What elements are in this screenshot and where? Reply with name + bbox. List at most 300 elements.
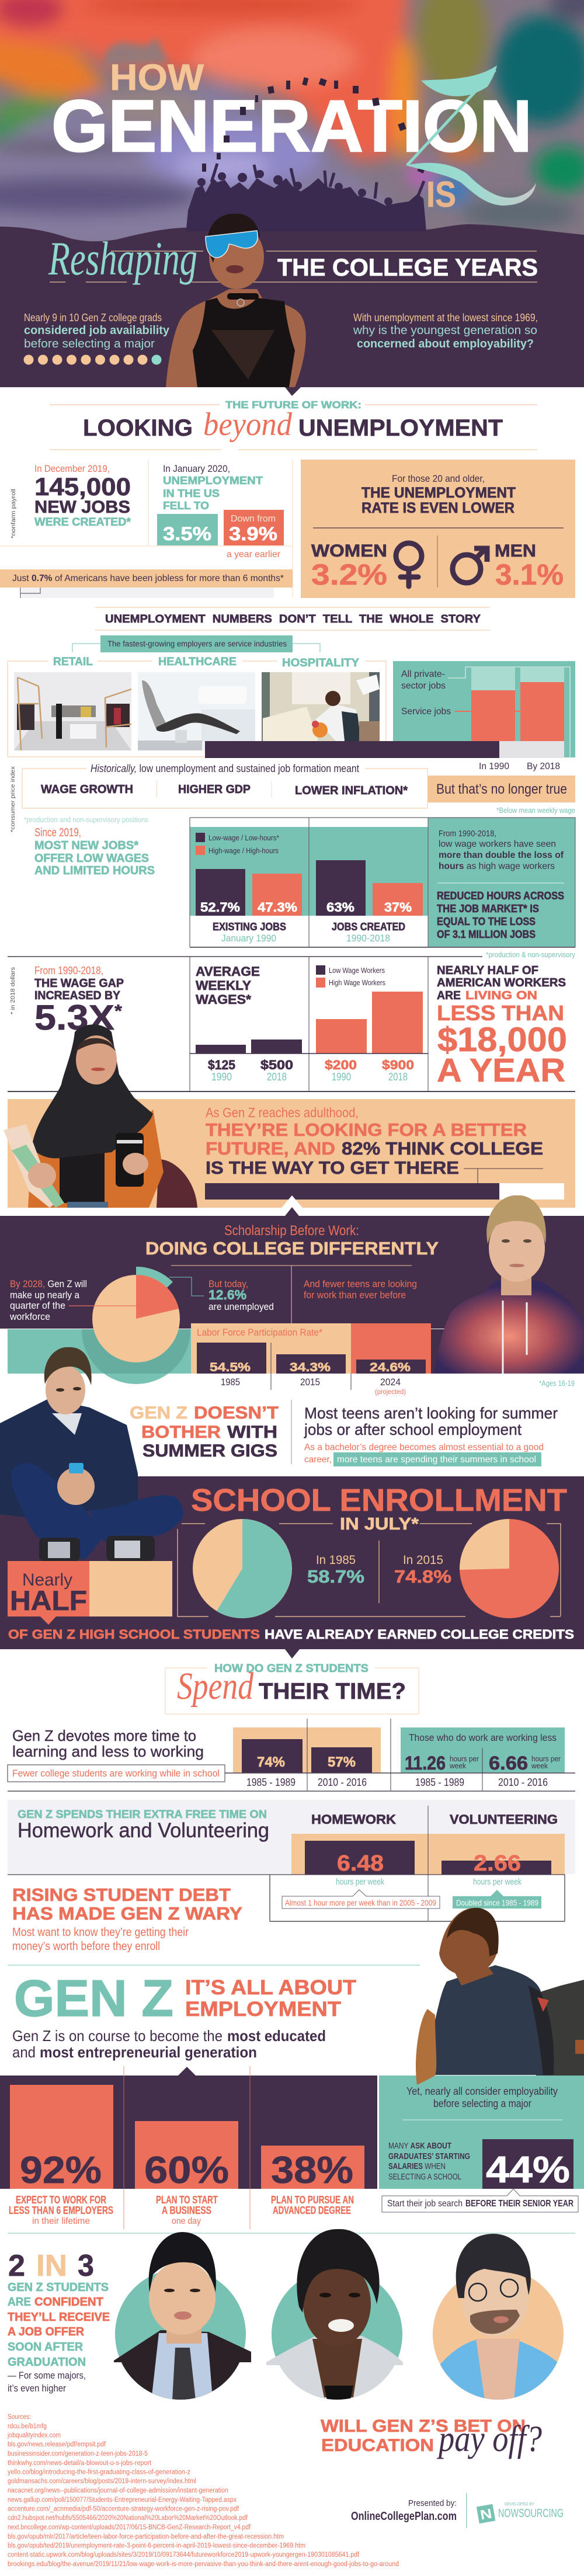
text: most new jobs: MOST NEW JOBS* xyxy=(34,839,138,852)
chart: average weekly wages: 1990 xyxy=(211,1071,232,1083)
hills xyxy=(0,224,584,387)
panel: working hours: 6.66 xyxy=(489,1753,528,1774)
sources list: yello.co/blog/introducing-the-first-graduating-class-of-generation-z xyxy=(8,2469,190,2476)
banner: looking for a better future: As Gen Z reaches adulthood, xyxy=(206,1105,359,1120)
panel: working hours: 1985 - 1989 xyxy=(415,1777,464,1788)
footer: presented by: OnlineCollegePlan.com xyxy=(351,2510,457,2523)
chart: average weekly wages: Low Wage Workers xyxy=(329,966,385,975)
chart years: In 1990 xyxy=(479,762,509,771)
footnote: 2018 dollars: * in 2018 dollars xyxy=(9,967,16,1014)
chart: existing jobs vs jobs created: 52.7% xyxy=(200,900,240,915)
panel: homework and volunteering: 6.48 xyxy=(337,1851,384,1876)
closing: will gen z's bet pay off: EDUCATION xyxy=(321,2436,434,2455)
chart: average weekly wages xyxy=(190,964,428,1083)
arrow: hero pointer xyxy=(285,387,301,396)
panel: working hours: Those who do work are working less xyxy=(409,1732,557,1743)
chart: service jobs share xyxy=(393,661,575,757)
chart: average weekly wages: $125 xyxy=(208,1058,235,1072)
year labels for labor chart: (projected) xyxy=(375,1388,406,1396)
panel: women and men rates: MEN xyxy=(495,541,536,561)
text: most teens: more teens are spending their summers in school xyxy=(337,1455,536,1465)
panel: service industries photos xyxy=(14,656,380,750)
stat: unemployment fell: 3.5% xyxy=(163,523,211,544)
stat: wage gap: 5.3X xyxy=(34,998,106,1037)
text: nearly 9 in 10: considered job availability xyxy=(24,324,170,337)
chart: expectations: 38% xyxy=(271,2149,353,2191)
photo: student with backpack xyxy=(416,1908,584,2085)
panel: working hours: hours per xyxy=(450,1755,479,1763)
labels: hours per week and callouts xyxy=(282,1877,541,1908)
footer: presented by xyxy=(351,2493,564,2528)
heading: how do gen z students spend their time: THEIR TIME? xyxy=(259,1679,406,1704)
photo: woman with sunglasses xyxy=(166,214,306,387)
chart: average weekly wages: WEEKLY xyxy=(196,978,251,993)
panel: consider employability: Yet, nearly all consider employability xyxy=(406,2085,558,2097)
section: scholarship before work xyxy=(0,1195,584,1384)
heading: how do gen z students spend their time xyxy=(165,1663,419,1714)
section: school enrollment: In 2015 xyxy=(403,1553,443,1567)
chart: service jobs share: sector jobs xyxy=(401,681,446,691)
text: most teens: jobs or after school employment xyxy=(304,1421,522,1438)
stat: wage gap: From 1990-2018, xyxy=(34,965,103,976)
stat: living on less than 18000: LESS THAN xyxy=(437,1001,564,1025)
stat: 2 in 3 confident: SOON AFTER xyxy=(8,2341,84,2353)
panel: loss of hours: REDUCED HOURS ACROSS xyxy=(437,890,564,902)
callout: job search before senior year xyxy=(382,2189,578,2212)
sources list: cdn2.hubspot.net/hubfs/5505466/2020%20National%20Labor%20Market%20Outlook.pdf xyxy=(8,2515,248,2522)
chart: existing jobs vs jobs created: High-wage / High-hours xyxy=(208,846,279,855)
photo: retail store xyxy=(14,672,131,750)
chart: average weekly wages: $900 xyxy=(382,1058,414,1072)
logo: nowsourcing xyxy=(477,2502,564,2523)
panel: women and men rates: 3.2% xyxy=(311,558,387,591)
text: most new jobs: AND LIMITED HOURS xyxy=(34,864,155,877)
stat: living on less than 18000: A YEAR xyxy=(437,1052,565,1089)
year labels for labor chart xyxy=(221,1343,575,1396)
portrait: woman in blazer xyxy=(266,2229,403,2406)
heading: rising student debt: HAS MADE GEN Z WARY xyxy=(12,1903,242,1924)
sources list xyxy=(7,2414,399,2568)
chart: existing jobs vs jobs created: 1990-2018 xyxy=(346,933,390,944)
heading: gen z all about employment xyxy=(12,1969,356,2061)
text: most teens: As a bachelor’s degree becomes almost essential to a good xyxy=(304,1442,544,1452)
heading: rising student debt: money’s worth before they enroll xyxy=(12,1940,160,1953)
banner: looking for a better future: THEY’RE LOOKING FOR A BETTER xyxy=(206,1120,527,1140)
stat: 145,000 new jobs: WERE CREATED* xyxy=(34,516,131,529)
chart: students working: 74% xyxy=(257,1754,285,1770)
label: fastest-growing employers: The fastest-growing employers are service industries xyxy=(107,639,287,648)
chart: labor force participation: 54.5% xyxy=(210,1361,251,1374)
logo: nowsourcing: N xyxy=(479,2505,493,2523)
text: fewer teens xyxy=(304,1278,417,1301)
sources list: goldmansachs.com/careers/blog/posts/2019-intern-survey/index.html xyxy=(8,2478,196,2485)
subtitle: the college years: THE COLLEGE YEARS xyxy=(277,253,538,281)
heading: gen z all about employment: most entrepreneurial generation xyxy=(40,2043,257,2061)
sources list: nacacnet.org/news--publications/journal-of-college-admission/instant-generation xyxy=(8,2487,228,2494)
chart: existing jobs vs jobs created: JOBS CREATED xyxy=(332,921,405,933)
panel: working hours: week xyxy=(449,1762,467,1770)
sources list: rdcu.be/b1mfg xyxy=(8,2423,47,2430)
hero banner xyxy=(0,0,584,387)
sources list: bls.gov/news.release/pdf/empsit.pdf xyxy=(8,2441,106,2448)
section: school enrollment: 58.7% xyxy=(307,1566,364,1587)
chart: existing jobs vs jobs created: Low-wage / Low-hours* xyxy=(208,833,279,842)
panel: women and men rates xyxy=(301,460,575,598)
stat: living on less than 18000: AMERICAN WORKERS xyxy=(437,976,566,989)
panel: historically: WAGE GROWTH xyxy=(41,783,133,796)
sources list: next.bncollege.com/wp-content/uploads/2017/06/15-BNCB-GenZ-Research-Report_v4.pdf xyxy=(8,2524,251,2531)
panel: homework and volunteering: Homework and Volunteering xyxy=(18,1819,269,1842)
heading: doing college differently: DOING COLLEGE DIFFERENTLY xyxy=(145,1238,439,1259)
chart: average weekly wages: 1990 xyxy=(332,1071,351,1083)
stat: living on less than 18000: LIVING ON xyxy=(465,989,537,1002)
footnote: nonfarm payroll: *nonfarm payroll xyxy=(10,489,17,538)
closing: will gen z's bet pay off xyxy=(321,2417,542,2459)
stat: 2 in 3 confident: ARE xyxy=(8,2296,31,2309)
sources list: bls.gov/opub/mlr/2017/article/teen-labor-force-participation-before-and-after-the-great-recession.htm xyxy=(8,2533,284,2540)
photo: teen sitting with phone xyxy=(0,1347,183,1561)
panel: homework and volunteering: GEN Z SPENDS THEIR EXTRA FREE TIME ON xyxy=(18,1809,267,1821)
chart: students working xyxy=(233,1727,381,1788)
title: how: HOW xyxy=(110,57,204,98)
text: with unemployment at the lowest: why is the youngest generation so xyxy=(353,324,537,337)
stat: 12.6 percent: are unemployed xyxy=(208,1301,274,1312)
text: nearly 9 in 10 xyxy=(24,312,170,350)
panel: historically xyxy=(22,763,427,808)
stat: 2 in 3 confident: CONFIDENT xyxy=(34,2296,103,2309)
section: school enrollment: 74.8% xyxy=(394,1566,451,1587)
pie: gen z share of workforce xyxy=(69,1267,204,1384)
stat: living on less than 18000: ARE xyxy=(437,989,461,1002)
heading: gen z doesn't bother: GEN Z xyxy=(130,1403,187,1423)
icon row: 9 of 10 dots xyxy=(23,355,161,364)
panel: working hours: 2010 - 2016 xyxy=(498,1777,548,1788)
chart: average weekly wages: High Wage Workers xyxy=(329,978,385,987)
stat: wage gap: * xyxy=(114,1002,122,1021)
stat: 12.6 percent: But today, xyxy=(208,1278,248,1289)
stat: 2 in 3 confident: GEN Z STUDENTS xyxy=(8,2281,109,2294)
icon: female symbol xyxy=(396,543,422,586)
chart: expectations xyxy=(0,2066,377,2229)
heading: gen z doesn't bother: BOTHER xyxy=(141,1423,221,1442)
photo: teen in galaxy hoodie xyxy=(434,1195,584,1374)
panel: loss of hours: more than double the loss of xyxy=(439,850,564,860)
chart: existing jobs vs jobs created xyxy=(190,827,428,944)
chart: average weekly wages: 2018 xyxy=(388,1071,408,1083)
chart: average weekly wages: $200 xyxy=(325,1058,357,1072)
text: most teens xyxy=(304,1405,558,1466)
sources list: news.gallup.com/poll/150077/Students-Entrepreneurial-Energy-Waiting-Tapped.aspx xyxy=(8,2497,237,2504)
heading: gen z doesn't bother: DOESN’T xyxy=(194,1403,279,1423)
stat: 145,000 new jobs: In December 2019, xyxy=(34,463,110,474)
stat: living on less than 18000: $18,000 xyxy=(437,1021,567,1059)
chart: expectations: 92% xyxy=(20,2149,102,2191)
sources list: jobqualityindex.com xyxy=(7,2432,61,2439)
year labels for labor chart: *Ages 16-19 xyxy=(539,1379,575,1388)
panel: homework and volunteering: HOMEWORK xyxy=(311,1812,396,1827)
chart: expectations: ADVANCED DEGREE xyxy=(273,2205,351,2216)
stat: 145,000 new jobs: NEW JOBS xyxy=(34,498,130,517)
chart: students working: 2010 - 2016 xyxy=(318,1777,367,1788)
banner: looking for a better future xyxy=(8,1099,575,1208)
text: by 2028: quarter of the xyxy=(10,1300,65,1311)
stat: 2 in 3 confident: GRADUATION xyxy=(8,2356,86,2369)
text: with unemployment at the lowest: concerned about employability? xyxy=(357,338,534,350)
stat: wage gap: INCREASED BY xyxy=(34,989,121,1002)
text: nearly 9 in 10: Nearly 9 in 10 Gen Z college grads xyxy=(24,312,162,324)
panel: service industries photos: HOSPITALITY xyxy=(282,657,359,669)
panel: service industries photos: HEALTHCARE xyxy=(158,656,237,668)
sources list: thinkwhy.com/news-detail/a-blowout-u-s-jobs-report xyxy=(8,2460,152,2467)
callout: no longer true xyxy=(427,776,575,802)
chart: service jobs share: Service jobs xyxy=(401,707,451,717)
panel: women and men rates: 3.1% xyxy=(495,558,564,591)
panel: historically: Historically, low unemployment and sustained job formation meant xyxy=(91,763,359,774)
text: most new jobs: OFFER LOW WAGES xyxy=(34,852,149,865)
rule lines xyxy=(50,251,537,282)
footnotes: *production and non-supervisory positions xyxy=(24,815,148,824)
panel: loss of hours: From 1990-2018, xyxy=(439,829,496,839)
heading: looking beyond unemployment: UNEMPLOYMENT xyxy=(298,415,503,441)
photo: dental chair xyxy=(138,672,255,750)
panel: consider employability: SELECTING A SCHOOL xyxy=(388,2172,461,2182)
text: most teens: career, xyxy=(304,1455,332,1465)
section: school enrollment xyxy=(0,1476,584,1659)
year labels for labor chart: 2024 xyxy=(380,1376,401,1388)
callout: nearly half: HALF xyxy=(10,1585,87,1616)
text: devotes more time: Fewer college students are working while in school xyxy=(12,1768,220,1779)
sources list: accenture.com/_acnmedia/pdf-50/accenture-strategy-workforce-gen-z-rising-pov.pdf xyxy=(8,2505,239,2512)
chart: expectations: PLAN TO PURSUE AN xyxy=(271,2194,354,2206)
chart: students working: 1985 - 1989 xyxy=(246,1777,296,1788)
portrait: man with glasses xyxy=(433,2234,566,2406)
callout: nearly half: Nearly xyxy=(22,1570,72,1590)
pie: enrollment 2015 xyxy=(460,1519,559,1618)
heading: gen z doesn't bother: SUMMER GIGS xyxy=(142,1441,277,1461)
panel: working hours xyxy=(401,1727,565,1788)
sources list: businessinsider.com/generation-z-teen-jobs-2018-5 xyxy=(8,2450,148,2457)
chart: average weekly wages: AVERAGE xyxy=(196,964,260,979)
panel: consider employability: MANY ASK ABOUT xyxy=(388,2141,451,2151)
text: devotes more time xyxy=(8,1727,225,1782)
chart: existing jobs vs jobs created: EXISTING JOBS xyxy=(213,921,286,933)
heading: rising student debt xyxy=(12,1885,242,1953)
text: nearly 9 in 10: before selecting a major xyxy=(24,338,155,350)
heading: gen z all about employment: EMPLOYMENT xyxy=(185,1998,341,2021)
graduates silhouette xyxy=(186,164,426,231)
heading: gen z all about employment: and xyxy=(12,2043,36,2061)
chart: expectations: in their lifetime xyxy=(32,2216,90,2226)
callout: jobless more than 6 months: Just 0.7% of Americans have been jobless for more than 6 months* xyxy=(12,573,284,583)
stat: unemployment fell xyxy=(157,463,284,559)
stat: 2 in 3 confident: A JOB OFFER xyxy=(8,2325,85,2338)
stat: wage gap xyxy=(34,965,124,1037)
section: school enrollment: HAVE ALREADY EARNED COLLEGE CREDITS xyxy=(265,1627,574,1642)
panel: working hours: 11.26 xyxy=(405,1753,446,1774)
heading: rising student debt: RISING STUDENT DEBT xyxy=(12,1885,231,1905)
heading: gen z doesn't bother: WITH xyxy=(227,1423,277,1442)
title: is: IS xyxy=(426,175,456,215)
stat: 145,000 new jobs: 145,000 xyxy=(34,473,131,501)
panel: loss of hours: hours as high wage workers xyxy=(439,861,555,871)
text: most new jobs: Since 2019, xyxy=(34,826,81,839)
sources list: brookings.edu/blog/the-avenue/2019/11/21/low-wage-work-is-more-pervasive-than-you-think-and-there-arent-enough-good-jobs-to-go-around xyxy=(8,2561,399,2568)
chart: average weekly wages: $500 xyxy=(260,1058,293,1072)
panel: loss of hours xyxy=(428,818,575,947)
chart: expectations: EXPECT TO WORK FOR xyxy=(16,2194,106,2206)
photo: hospitality xyxy=(262,672,380,741)
labels: hours per week and callouts: hours per week xyxy=(336,1877,384,1887)
panel: homework and volunteering: VOLUNTEERING xyxy=(450,1812,558,1827)
heading: looking beyond unemployment: beyond xyxy=(203,406,293,443)
title: generation: GENERATION xyxy=(51,86,532,167)
text: by 2028 xyxy=(9,1278,87,1322)
pie: enrollment 1985 xyxy=(193,1519,292,1618)
panel: homework and volunteering: 2.66 xyxy=(474,1851,521,1876)
text: with unemployment at the lowest: With unemployment at the lowest since 1969, xyxy=(353,312,538,324)
panel: homework and volunteering xyxy=(8,1800,575,1876)
heading: looking beyond unemployment xyxy=(50,399,537,450)
closing: will gen z's bet pay off: WILL GEN Z’S BET ON xyxy=(321,2417,526,2436)
callout: job search before senior year: Start their job search xyxy=(387,2199,463,2209)
stat: unemployment fell: 3.9% xyxy=(229,523,277,544)
sources list: Sources: xyxy=(8,2414,31,2421)
panel: working hours: hours per xyxy=(531,1755,561,1763)
text: fewer teens: And fewer teens are looking xyxy=(304,1278,417,1289)
panel: historically: LOWER INFLATION* xyxy=(295,784,408,797)
chart: labor force participation: Labor Force Participation Rate* xyxy=(197,1327,322,1338)
section: school enrollment: In 1985 xyxy=(316,1553,356,1567)
text: devotes more time: learning and less to working xyxy=(12,1743,204,1760)
panel: consider employability xyxy=(379,2076,584,2191)
text: by 2028: workforce xyxy=(9,1311,50,1322)
panel: loss of hours: THE JOB MARKET* IS xyxy=(437,903,539,915)
panel: women and men rates: THE UNEMPLOYMENT xyxy=(361,485,516,501)
heading: gen z all about employment: most educated xyxy=(227,2027,326,2045)
banner: looking for a better future: FUTURE, AND xyxy=(206,1138,335,1159)
heading: looking beyond unemployment: THE FUTURE OF WORK: xyxy=(225,399,361,411)
text: fewer teens: for work than ever before xyxy=(304,1289,406,1301)
bar: dark strip xyxy=(205,741,564,758)
chart: expectations: 60% xyxy=(144,2149,229,2191)
panel: consider employability: 44% xyxy=(486,2149,570,2191)
panel: loss of hours: EQUAL TO THE LOSS xyxy=(437,916,536,927)
heading: gen z all about employment: IT’S ALL ABOUT xyxy=(185,1976,356,1999)
closing: will gen z's bet pay off: pay off? xyxy=(437,2418,542,2459)
panel: working hours: week xyxy=(531,1762,548,1770)
panel: historically: HIGHER GDP xyxy=(178,783,251,796)
stat: 2 in 3 confident: — For some majors, xyxy=(8,2370,86,2381)
text: most teens: Most teens aren’t looking for summer xyxy=(304,1405,558,1422)
heading: how do gen z students spend their time: Spend xyxy=(177,1665,254,1708)
chart: existing jobs vs jobs created: 63% xyxy=(326,900,354,915)
stat: 12.6 percent xyxy=(208,1278,274,1312)
stat: living on less than 18000 xyxy=(437,964,567,1089)
panel: women and men rates: For those 20 and older, xyxy=(392,473,485,484)
chart: average weekly wages: 2018 xyxy=(267,1071,287,1083)
heading: doing college differently: Scholarship Before Work: xyxy=(224,1223,359,1239)
chart: labor force participation: 34.3% xyxy=(290,1361,331,1374)
heading: rising student debt: Most want to know they’re getting their xyxy=(12,1926,189,1939)
logo: nowsourcing: DEVELOPED BY xyxy=(505,2502,534,2507)
panel: loss of hours: low wage workers have seen xyxy=(439,839,556,849)
heading: gen z all about employment: Gen Z is on course to become the xyxy=(12,2027,223,2045)
stat: unemployment fell: IN THE US xyxy=(163,488,220,499)
panel: consider employability: SALARIES WHEN xyxy=(388,2161,446,2171)
chart: expectations: PLAN TO START xyxy=(156,2194,218,2206)
footnotes xyxy=(24,806,575,824)
banner: looking for a better future: IS THE WAY TO GET THERE xyxy=(206,1157,459,1178)
portrait: man in suit xyxy=(114,2232,251,2406)
chart: average weekly wages: WAGES* xyxy=(196,992,251,1007)
labels: hours per week and callouts: Almost 1 hour more per week than in 2005 - 2009 xyxy=(285,1898,436,1907)
labels: hours per week and callouts: Doubled since 1985 - 1989 xyxy=(456,1898,538,1907)
callout: nearly half xyxy=(8,1561,172,1625)
footer: presented by: Presented by: xyxy=(408,2498,457,2508)
icon: male symbol xyxy=(453,548,487,583)
callout: jobless more than 6 months xyxy=(0,569,293,598)
heading: gen z all about employment: GEN Z xyxy=(14,1969,173,2027)
stat: living on less than 18000: NEARLY HALF OF xyxy=(437,964,538,977)
section: school enrollment: OF GEN Z HIGH SCHOOL STUDENTS xyxy=(8,1627,260,1642)
chart: expectations: LESS THAN 6 EMPLOYERS xyxy=(9,2205,113,2216)
title: script Z xyxy=(406,65,536,206)
chart: students working: 57% xyxy=(328,1754,356,1770)
labels: hours per week and callouts: hours per week xyxy=(473,1877,522,1887)
stat: unemployment fell: a year earlier xyxy=(227,550,281,559)
footnote: consumer price index: *consumer price index xyxy=(9,766,16,832)
arrow: white chevron xyxy=(274,1195,310,1216)
heading: looking beyond unemployment: LOOKING xyxy=(83,415,193,441)
heading: gen z doesn't bother xyxy=(130,1403,279,1461)
year labels for labor chart: 1985 xyxy=(221,1376,240,1388)
stat: unemployment fell: FELL TO xyxy=(163,500,209,512)
callout: no longer true: But that’s no longer true xyxy=(436,781,567,797)
heading: unemployment numbers: UNEMPLOYMENT NUMBERS DON’T TELL THE WHOLE STORY xyxy=(105,613,481,625)
photo: student in hijab xyxy=(4,1024,197,1208)
chart years: By 2018 xyxy=(527,762,560,771)
stat: 2 in 3 confident: IN xyxy=(36,2249,67,2283)
stat: unemployment fell: Down from xyxy=(231,514,276,524)
chart: labor force participation: 24.6% xyxy=(370,1361,411,1374)
panel: service industries photos: RETAIL xyxy=(53,656,93,668)
heading: how do gen z students spend their time: HOW DO GEN Z STUDENTS xyxy=(214,1663,369,1675)
stat: wage gap: THE WAGE GAP xyxy=(34,977,124,990)
stat: 2 in 3 confident: THEY’LL RECEIVE xyxy=(8,2311,110,2324)
text: devotes more time: Gen Z devotes more time to xyxy=(12,1727,196,1744)
panel: women and men rates: WOMEN xyxy=(311,541,387,561)
stat: unemployment fell: UNEMPLOYMENT xyxy=(163,475,263,486)
chart: existing jobs vs jobs created: 47.3% xyxy=(258,900,297,915)
chart: existing jobs vs jobs created: January 1990 xyxy=(221,933,276,944)
section: school enrollment: IN JULY* xyxy=(340,1515,419,1534)
stat: 2 in 3 confident xyxy=(8,2249,110,2394)
heading: doing college differently xyxy=(145,1223,439,1259)
chart: existing jobs vs jobs created: 37% xyxy=(384,900,412,915)
banner: looking for a better future: 82% THINK COLLEGE xyxy=(342,1138,543,1159)
text: by 2028: By 2028, Gen Z will xyxy=(10,1278,87,1289)
stat: 2 in 3 confident: 3 xyxy=(78,2249,94,2283)
chart: expectations: one day xyxy=(172,2216,201,2226)
stat: 145,000 new jobs xyxy=(34,463,131,529)
section: school enrollment: SCHOOL ENROLLMENT xyxy=(191,1483,567,1518)
year labels for labor chart: 2015 xyxy=(300,1376,320,1388)
stat: 2 in 3 confident: it’s even higher xyxy=(8,2383,66,2394)
panel: loss of hours: OF 3.1 MILLION JOBS xyxy=(437,929,536,940)
subtitle: reshaping: Reshaping xyxy=(48,232,197,285)
panel: women and men rates: RATE IS EVEN LOWER xyxy=(361,500,515,516)
stat: 2 in 3 confident: 2 xyxy=(8,2249,25,2283)
